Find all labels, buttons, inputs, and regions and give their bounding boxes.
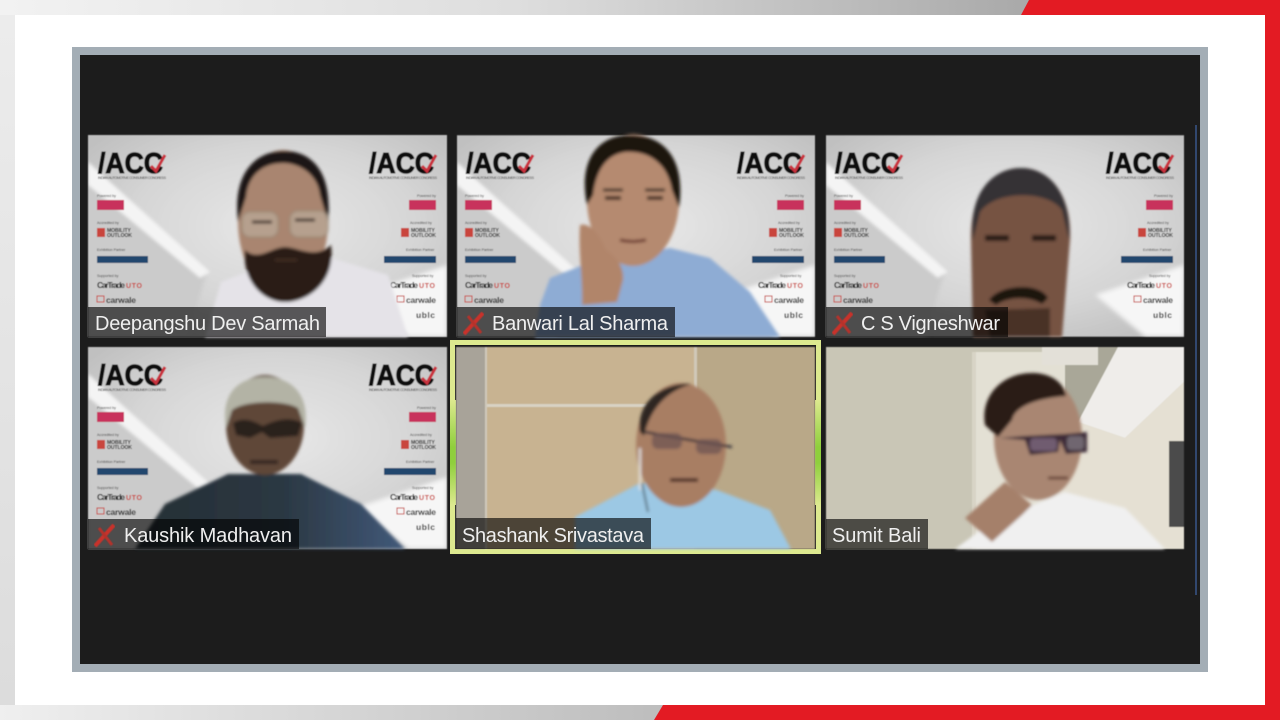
sponsors right: Supported by bbox=[412, 486, 434, 490]
sponsors right: OUTLOOK bbox=[1148, 233, 1173, 239]
sponsors right: Powered by bbox=[785, 194, 804, 198]
sponsors left: Supported by bbox=[834, 274, 856, 278]
sponsors left: CarTrade bbox=[97, 280, 125, 290]
sponsors right bbox=[752, 194, 804, 320]
sponsors left: OUTLOOK bbox=[844, 233, 869, 239]
sponsors right: carwale bbox=[774, 295, 804, 305]
sponsors left: carwale bbox=[843, 295, 873, 305]
sponsors left: Accredited by bbox=[97, 433, 119, 437]
sponsors left: Supported by bbox=[97, 486, 119, 490]
sponsors right: MOBILITY bbox=[1148, 228, 1173, 234]
sponsors left: carwale bbox=[474, 295, 504, 305]
office background bbox=[456, 347, 815, 549]
logo: IACC right: /ACC bbox=[737, 148, 802, 180]
video tile: C S Vigneshwar bbox=[826, 135, 1184, 337]
sponsors right: Supported by bbox=[1149, 274, 1171, 278]
sponsors left: OUTLOOK bbox=[107, 445, 132, 451]
sponsors left: UTO bbox=[126, 495, 143, 502]
sponsors right: Exhibition Partner bbox=[774, 248, 803, 252]
sponsors left: Supported by bbox=[465, 274, 487, 278]
logo: IACC left: /ACC bbox=[466, 148, 531, 180]
sponsors right: OUTLOOK bbox=[411, 445, 436, 451]
sponsors left: carwale bbox=[106, 507, 136, 517]
video tile: Sumit Bali bbox=[826, 347, 1184, 549]
logo: IACC left: INDIAN AUTOMOTIVE CONSUMER CONGRESS bbox=[98, 176, 167, 180]
sponsors left bbox=[465, 194, 516, 305]
sponsors right: ublc bbox=[1153, 310, 1172, 320]
participant bbox=[205, 150, 408, 337]
sponsors right: Powered by bbox=[1154, 194, 1173, 198]
video tile: Shashank Srivastava (active speaker) bbox=[450, 342, 821, 552]
participant bbox=[971, 168, 1070, 337]
sponsors right: MOBILITY bbox=[411, 440, 436, 446]
sponsors left: Accredited by bbox=[97, 221, 119, 225]
sponsors right: carwale bbox=[406, 295, 436, 305]
sponsors right: CarTrade bbox=[1127, 280, 1155, 290]
icon: muted microphone bbox=[833, 313, 852, 334]
sponsors right: carwale bbox=[1143, 295, 1173, 305]
sponsors left: OUTLOOK bbox=[475, 233, 500, 239]
active speaker border bbox=[450, 342, 821, 552]
participant bbox=[535, 134, 780, 337]
sponsors left: UTO bbox=[126, 283, 143, 290]
logo: IACC right: /ACC bbox=[369, 360, 434, 392]
sponsors right: carwale bbox=[406, 507, 436, 517]
sponsors right bbox=[384, 406, 436, 532]
sponsors left: MOBILITY bbox=[844, 228, 869, 234]
sponsors left: MOBILITY bbox=[107, 440, 132, 446]
sponsors left: Powered by bbox=[834, 194, 853, 198]
sponsors left: MOBILITY bbox=[475, 228, 500, 234]
name label bbox=[88, 307, 326, 337]
sponsors right: MOBILITY bbox=[411, 228, 436, 234]
sponsors left: CarTrade bbox=[97, 492, 125, 502]
logo: IACC right: INDIAN AUTOMOTIVE CONSUMER CONGRESS bbox=[737, 176, 806, 180]
video tile: Kaushik Madhavan bbox=[88, 347, 447, 549]
sponsors left: Accredited by bbox=[465, 221, 487, 225]
name label: Shashank Srivastava bbox=[462, 525, 645, 547]
sponsors left: Exhibition Partner bbox=[97, 248, 126, 252]
sponsors left: UTO bbox=[494, 283, 511, 290]
sponsors right: CarTrade bbox=[758, 280, 786, 290]
name label: C S Vigneshwar bbox=[861, 313, 1000, 335]
sponsors right bbox=[384, 194, 436, 320]
video tile: Banwari Lal Sharma bbox=[457, 134, 815, 337]
logo: IACC left: /ACC bbox=[98, 148, 163, 180]
sponsors right: UTO bbox=[419, 495, 436, 502]
sponsors right: CarTrade bbox=[390, 492, 418, 502]
sponsors left: Powered by bbox=[97, 406, 116, 410]
sponsors right: ublc bbox=[416, 310, 435, 320]
sponsors right: MOBILITY bbox=[779, 228, 804, 234]
sponsors left: CarTrade bbox=[465, 280, 493, 290]
sponsors right: UTO bbox=[419, 283, 436, 290]
sponsors right: Accredited by bbox=[778, 221, 800, 225]
sponsors right: CarTrade bbox=[390, 280, 418, 290]
logo: IACC right: INDIAN AUTOMOTIVE CONSUMER CONGRESS bbox=[1106, 176, 1175, 180]
video tile: Deepangshu Dev Sarmah bbox=[88, 135, 447, 337]
name label bbox=[826, 307, 1008, 337]
sponsors left: Exhibition Partner bbox=[834, 248, 863, 252]
sponsors right: Supported by bbox=[412, 274, 434, 278]
sponsors right: Exhibition Partner bbox=[406, 248, 435, 252]
logo: IACC left: INDIAN AUTOMOTIVE CONSUMER CONGRESS bbox=[466, 176, 535, 180]
logo: IACC right: INDIAN AUTOMOTIVE CONSUMER CONGRESS bbox=[369, 388, 438, 392]
logo: IACC left: INDIAN AUTOMOTIVE CONSUMER CONGRESS bbox=[835, 176, 904, 180]
sponsors left: MOBILITY bbox=[107, 228, 132, 234]
participant bbox=[135, 375, 405, 549]
sponsors right: Accredited by bbox=[410, 221, 432, 225]
name label bbox=[826, 519, 928, 549]
room background bbox=[826, 347, 1184, 549]
sponsors left: Exhibition Partner bbox=[465, 248, 494, 252]
sponsors left: Accredited by bbox=[834, 221, 856, 225]
participant bbox=[955, 373, 1165, 549]
icon: muted microphone bbox=[464, 313, 483, 334]
sponsors right: Supported by bbox=[780, 274, 802, 278]
sponsors left: UTO bbox=[863, 283, 880, 290]
name label: Kaushik Madhavan bbox=[124, 525, 292, 547]
name label: Banwari Lal Sharma bbox=[492, 313, 669, 335]
name label bbox=[456, 518, 651, 549]
name label bbox=[457, 307, 675, 337]
sponsors left: Powered by bbox=[465, 194, 484, 198]
sponsors right: UTO bbox=[787, 283, 804, 290]
sponsors right: Accredited by bbox=[410, 433, 432, 437]
sponsors right: OUTLOOK bbox=[411, 233, 436, 239]
sponsors left bbox=[97, 406, 148, 517]
sponsors right: UTO bbox=[1156, 283, 1173, 290]
sponsors left: Supported by bbox=[97, 274, 119, 278]
sponsors right: ublc bbox=[784, 310, 803, 320]
sponsors left: Powered by bbox=[97, 194, 116, 198]
sponsors right: Powered by bbox=[417, 194, 436, 198]
sponsors right: Exhibition Partner bbox=[1143, 248, 1172, 252]
sponsors left: OUTLOOK bbox=[107, 233, 132, 239]
name label: Sumit Bali bbox=[832, 525, 921, 547]
sponsors right: ublc bbox=[416, 522, 435, 532]
logo: IACC left: /ACC bbox=[835, 148, 900, 180]
sponsors left bbox=[834, 194, 885, 305]
name label: Deepangshu Dev Sarmah bbox=[95, 313, 320, 335]
sponsors left: Exhibition Partner bbox=[97, 460, 126, 464]
sponsors right: Exhibition Partner bbox=[406, 460, 435, 464]
sponsors right bbox=[1121, 194, 1173, 320]
logo: IACC left: INDIAN AUTOMOTIVE CONSUMER CONGRESS bbox=[98, 388, 167, 392]
icon: muted microphone bbox=[95, 525, 114, 546]
video call window bbox=[72, 47, 1208, 672]
name label bbox=[88, 519, 299, 549]
participant bbox=[575, 383, 791, 549]
sponsors left bbox=[97, 194, 148, 305]
logo: IACC right: INDIAN AUTOMOTIVE CONSUMER CONGRESS bbox=[369, 176, 438, 180]
sponsors left: CarTrade bbox=[834, 280, 862, 290]
sponsors right: OUTLOOK bbox=[779, 233, 804, 239]
logo: IACC left: /ACC bbox=[98, 360, 163, 392]
sponsors left: carwale bbox=[106, 295, 136, 305]
logo: IACC right: /ACC bbox=[369, 148, 434, 180]
logo: IACC right: /ACC bbox=[1106, 148, 1171, 180]
sponsors right: Accredited by bbox=[1147, 221, 1169, 225]
sponsors right: Powered by bbox=[417, 406, 436, 410]
